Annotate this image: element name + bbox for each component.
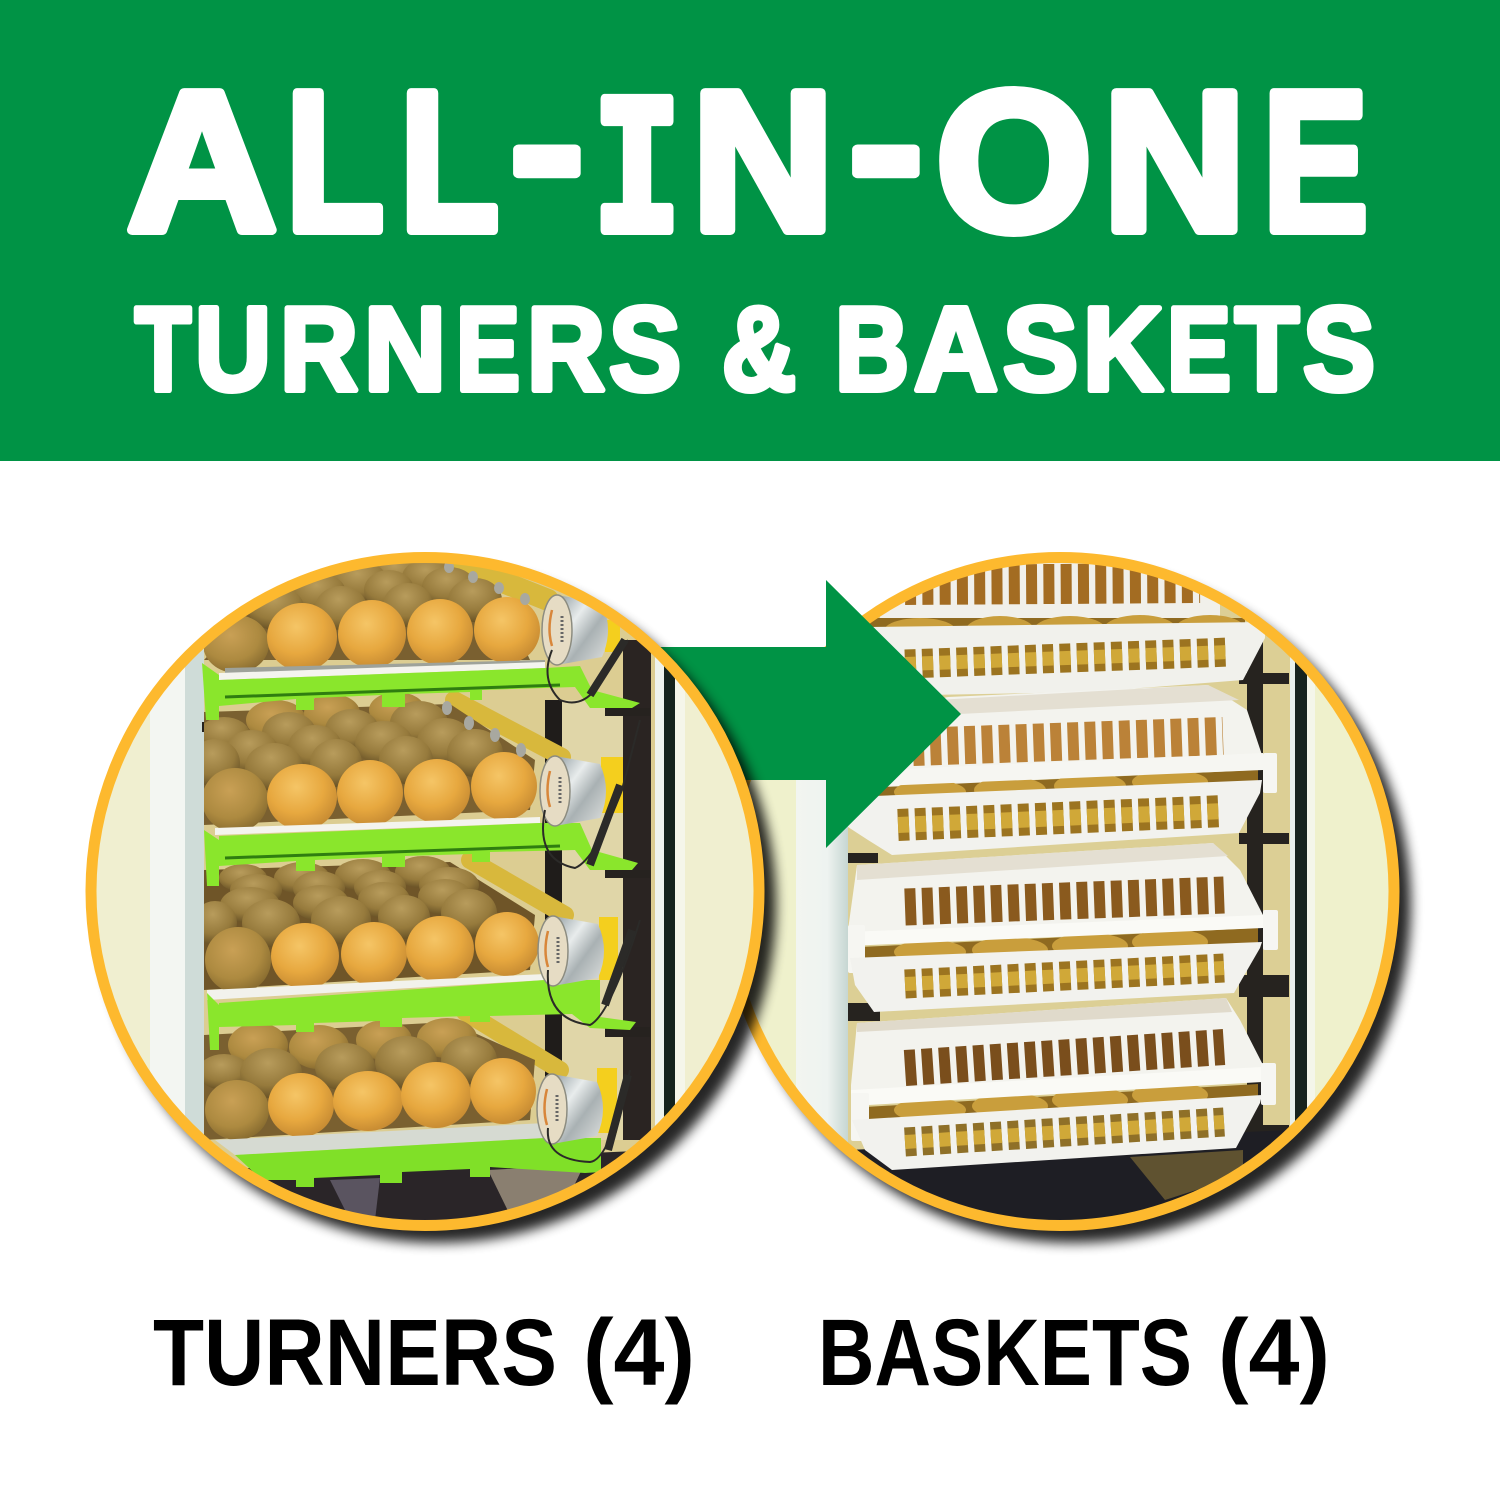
third basket — [848, 843, 1278, 1012]
title: TURNERS & BASKETS: R — [527, 283, 605, 416]
title: ALL-IN-ONE: - — [849, 34, 923, 256]
title: TURNERS & BASKETS: R — [280, 283, 358, 416]
yellow blocks — [597, 620, 623, 1133]
title: TURNERS & BASKETS: N — [364, 283, 446, 416]
title: ALL-IN-ONE: I — [593, 64, 681, 290]
cables — [542, 638, 628, 1163]
title: TURNERS & BASKETS: T — [1235, 283, 1299, 416]
label: turners: TURNERS — [153, 1300, 557, 1406]
title: ALL-IN-ONE: O — [936, 51, 1092, 273]
second basket — [848, 685, 1277, 855]
circle shadow — [100, 567, 776, 1243]
yellow rods — [454, 565, 565, 1070]
row 4 rail — [215, 1123, 601, 1187]
panel: turners photo circle — [85, 550, 776, 1243]
title: TURNERS & BASKETS: S — [609, 283, 681, 416]
black rail supports — [202, 708, 623, 1037]
photo: incubator with eggs — [85, 550, 765, 1240]
row 4 eggs — [198, 1018, 536, 1140]
arrow — [640, 580, 961, 848]
title: ALL-IN-ONE: A — [127, 51, 277, 273]
label: baskets: (4) — [1218, 1300, 1330, 1406]
panel: baskets photo circle — [720, 550, 1411, 1243]
photo: incubator background — [748, 563, 1388, 1200]
label: baskets: BASKETS — [818, 1300, 1192, 1406]
title: TURNERS & BASKETS: T — [135, 283, 191, 416]
row 1 rail — [202, 660, 640, 720]
title: ALL-IN-ONE: L — [400, 51, 499, 273]
title: ALL-IN-ONE: L — [286, 51, 384, 273]
title: TURNERS & BASKETS: U — [195, 283, 271, 416]
grey pegs — [442, 561, 530, 757]
row 1 eggs — [203, 555, 540, 673]
label: turners: (4) — [583, 1300, 695, 1406]
top basket — [868, 550, 1265, 695]
title: TURNERS & BASKETS: E — [1167, 283, 1231, 416]
title: ALL-IN-ONE: - — [510, 34, 584, 256]
header band — [0, 0, 1500, 461]
row 3 eggs — [193, 856, 539, 993]
title: ALL-IN-ONE: N — [1103, 51, 1246, 273]
title: TURNERS & BASKETS: E — [456, 283, 520, 416]
title: TURNERS & BASKETS: A — [914, 283, 998, 416]
title: TURNERS & BASKETS: & — [722, 283, 796, 416]
title: TURNERS & BASKETS: B — [835, 283, 909, 416]
row 2 eggs — [190, 692, 537, 832]
title: TURNERS & BASKETS: S — [1303, 283, 1375, 416]
circle shadow — [735, 567, 1411, 1243]
eggs — [190, 555, 540, 1140]
title: TURNERS & BASKETS: K — [1083, 283, 1163, 416]
title: TURNERS & BASKETS: S — [1003, 283, 1078, 416]
row 3 rail — [207, 974, 636, 1050]
title: ALL-IN-ONE: E — [1263, 51, 1368, 273]
bottom basket — [851, 998, 1276, 1170]
row 2 rail — [204, 817, 638, 886]
gold ring — [91, 558, 759, 1226]
motors — [537, 595, 608, 1144]
title: ALL-IN-ONE: N — [692, 51, 834, 273]
gold ring — [726, 558, 1394, 1226]
